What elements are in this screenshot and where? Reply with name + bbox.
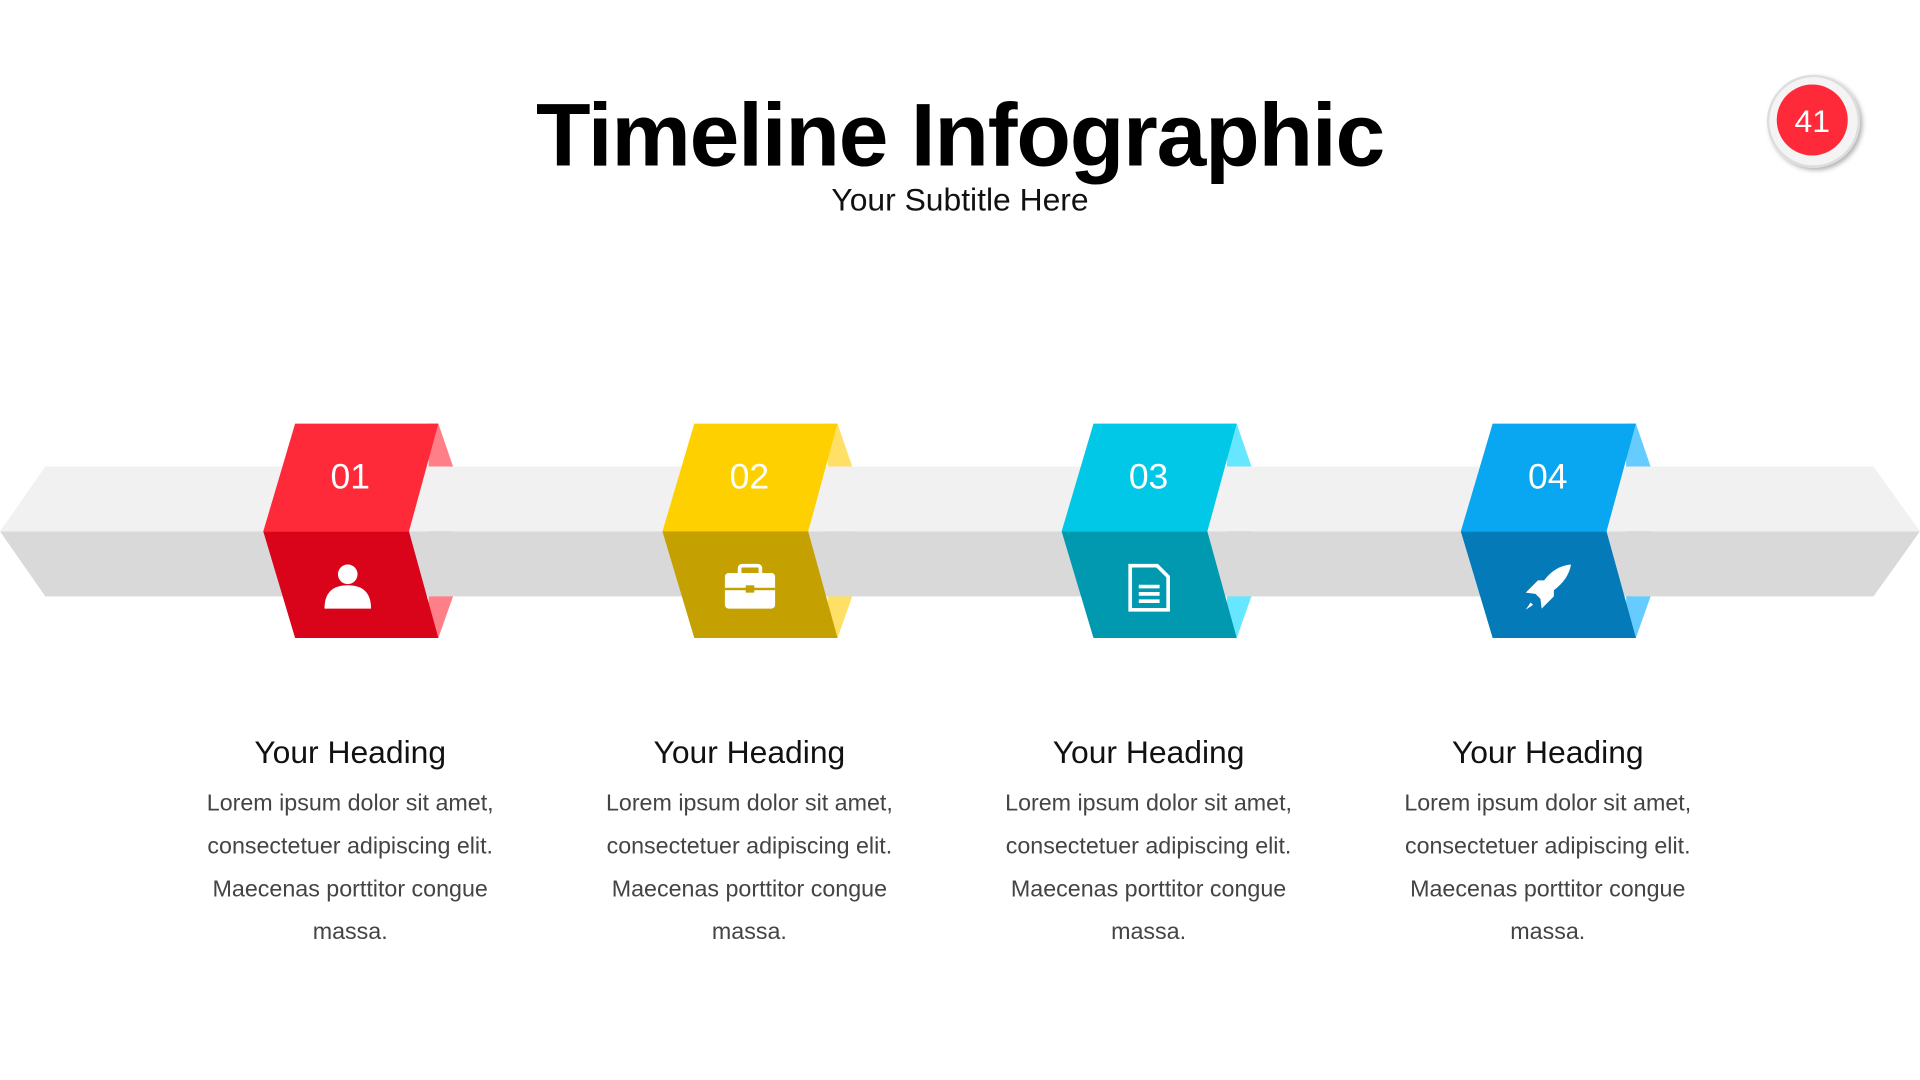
text column 1: Maecenas porttitor congue bbox=[213, 875, 488, 901]
step 04 block bbox=[1461, 424, 1636, 638]
text column 1: massa. bbox=[313, 918, 388, 944]
page badge: 41 bbox=[1795, 103, 1830, 139]
text column 1 bbox=[207, 734, 494, 944]
text column 4: Lorem ipsum dolor sit amet, bbox=[1404, 790, 1691, 816]
text column 4: massa. bbox=[1510, 918, 1585, 944]
icon: rocket bbox=[1526, 564, 1571, 610]
text column 4: Maecenas porttitor congue bbox=[1410, 875, 1685, 901]
text column 1: Your Heading bbox=[254, 734, 446, 770]
text column 2: consectetuer adipiscing elit. bbox=[607, 832, 892, 858]
text column 2: massa. bbox=[712, 918, 787, 944]
text column 1: Lorem ipsum dolor sit amet, bbox=[207, 790, 494, 816]
subtitle: Your Subtitle Here bbox=[831, 182, 1089, 218]
step 01 block: 01 bbox=[330, 457, 370, 497]
title: Timeline Infographic bbox=[536, 84, 1384, 184]
text column 2: Your Heading bbox=[654, 734, 845, 770]
step 04 block: 04 bbox=[1528, 457, 1568, 497]
text column 3: massa. bbox=[1111, 918, 1186, 944]
text column 2 bbox=[606, 734, 893, 944]
text column 3: Lorem ipsum dolor sit amet, bbox=[1005, 790, 1292, 816]
text column 3: Maecenas porttitor congue bbox=[1011, 875, 1286, 901]
icon: briefcase bbox=[725, 566, 775, 609]
text column 4 bbox=[1404, 734, 1691, 944]
text column 3: Your Heading bbox=[1053, 734, 1244, 770]
step 02 block bbox=[662, 424, 838, 638]
text column 4: consectetuer adipiscing elit. bbox=[1405, 832, 1691, 858]
text column 1: consectetuer adipiscing elit. bbox=[207, 832, 493, 858]
step 01 block bbox=[263, 424, 438, 638]
text column 2: Lorem ipsum dolor sit amet, bbox=[606, 790, 893, 816]
side flaps bbox=[429, 424, 1651, 638]
icon: person bbox=[324, 564, 371, 609]
timeline bar bbox=[0, 467, 1920, 596]
text column 4: Your Heading bbox=[1452, 734, 1644, 770]
page badge bbox=[1768, 76, 1859, 167]
text column 3 bbox=[1005, 734, 1292, 944]
icon: document bbox=[1130, 566, 1168, 610]
text column 2: Maecenas porttitor congue bbox=[612, 875, 887, 901]
step 02 block: 02 bbox=[730, 457, 769, 497]
step 03 block bbox=[1062, 424, 1237, 638]
text column 3: consectetuer adipiscing elit. bbox=[1006, 832, 1291, 858]
step 03 block: 03 bbox=[1129, 457, 1168, 497]
